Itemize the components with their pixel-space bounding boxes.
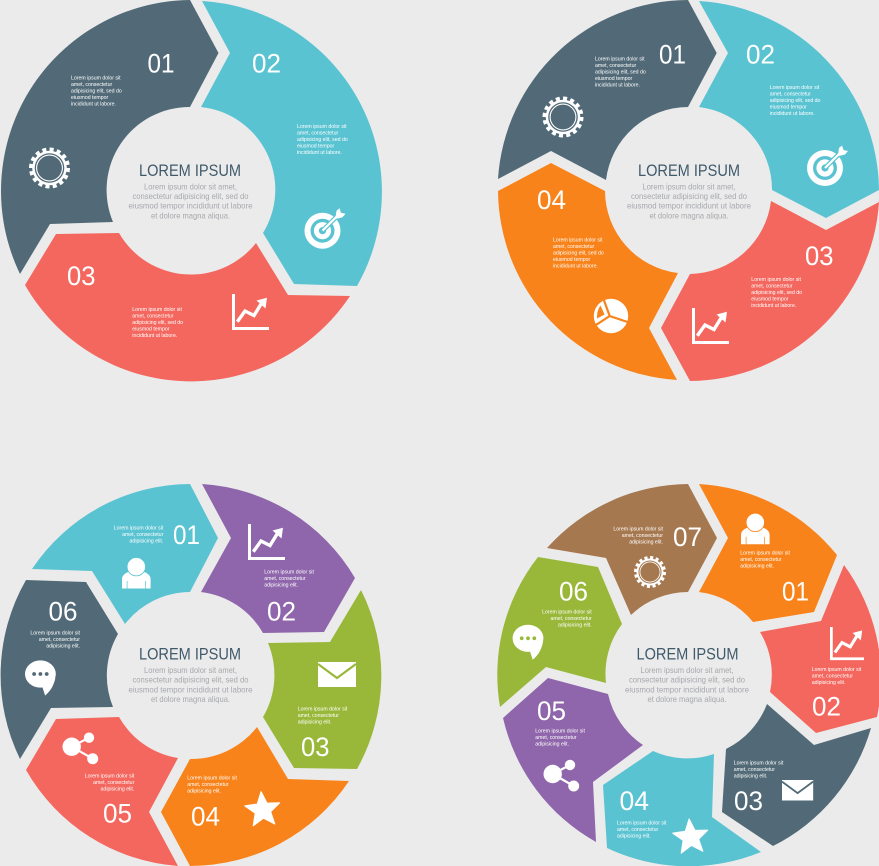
text block 02: amet, consectetur (770, 92, 811, 98)
text block 05: Lorem ipsum dolor sit (535, 729, 585, 735)
text block 02: Lorem ipsum dolor sit (770, 85, 820, 91)
number 01: 01 (173, 520, 200, 550)
center text: et dolore magna aliqua. (151, 695, 230, 704)
text block 05: Lorem ipsum dolor sit (85, 774, 135, 780)
text block 03: eiusmod tempor (751, 296, 789, 302)
text block 07: adipisicing elit. (629, 539, 663, 545)
text block 03: amet, consectetur (298, 713, 339, 719)
text block 02: adipisicing elit. (264, 583, 298, 589)
segment 02 purple (201, 484, 355, 633)
text block 02: adipisicing elit, sed do (770, 98, 821, 104)
number 03: 03 (734, 786, 763, 816)
center text: et dolore magna aliqua. (650, 211, 728, 220)
text block 01: Lorem ipsum dolor sit (71, 76, 121, 82)
number 06: 06 (559, 577, 588, 607)
text block 01: eiusmod tempor (595, 76, 632, 82)
text block 02: amet, consectetur (812, 674, 853, 680)
number 01: 01 (148, 49, 174, 79)
text block 01: amet, consectetur (595, 63, 637, 69)
center text: Lorem ipsum dolor sit amet, (640, 666, 734, 675)
text block 03: Lorem ipsum dolor sit (751, 277, 801, 283)
text block 02: eiusmod tempor (770, 104, 807, 110)
panel: three-step cycle diagram (1, 0, 382, 381)
text block 01: amet, consectetur (122, 532, 164, 538)
text block 03: eiusmod tempor (132, 326, 170, 332)
text block 03: incididunt ut labore. (751, 303, 796, 309)
center heading: LOREM IPSUM (636, 644, 738, 663)
text block 04: incididunt ut labore. (553, 264, 598, 270)
icon: target (807, 146, 848, 186)
icon: speech bubble (513, 625, 543, 660)
center text: consectetur adipisicing elit, sed do (132, 192, 249, 201)
number 02: 02 (267, 597, 296, 627)
text block 01: incididunt ut labore. (71, 102, 116, 108)
center text: consectetur adipisicing elit, sed do (629, 676, 745, 685)
icon: star (244, 790, 282, 826)
segment 02 blue (699, 1, 879, 218)
segment 07 brown (547, 484, 717, 615)
text block 03: adipisicing elit, sed do (132, 320, 183, 326)
number 02: 02 (812, 692, 841, 722)
text block 02: amet, consectetur (264, 576, 306, 582)
icon: envelope (318, 662, 356, 687)
number 03: 03 (805, 241, 834, 271)
panel: seven-step cycle diagram (497, 484, 879, 866)
text block 02: eiusmod tempor (297, 144, 334, 150)
text block 06: Lorem ipsum dolor sit (542, 609, 592, 615)
text block 04: adipisicing elit. (617, 833, 651, 839)
number 03: 03 (67, 261, 96, 291)
number 04: 04 (537, 185, 566, 215)
text block 03: amet, consectetur (751, 284, 793, 290)
text block 07: amet, consectetur (622, 533, 663, 539)
segment 06 dark slate (1, 580, 118, 759)
center text: eiusmod tempor incididunt ut labore (128, 202, 253, 211)
text block 04: amet, consectetur (187, 782, 229, 788)
text block 01: adipisicing elit, sed do (71, 88, 122, 94)
text block 01: adipisicing elit, sed do (595, 70, 646, 76)
text block 01: amet, consectetur (740, 557, 782, 563)
text block 06: Lorem ipsum dolor sit (30, 631, 81, 637)
text block 03: amet, consectetur (132, 314, 174, 320)
text block 03: amet, consectetur (734, 767, 775, 773)
segment 02 blue (201, 1, 382, 286)
center text: eiusmod tempor incididunt ut labore (128, 685, 253, 694)
number 02: 02 (252, 49, 281, 79)
text block 04: amet, consectetur (553, 244, 595, 250)
text block 03: adipisicing elit. (298, 720, 331, 726)
icon: share network (544, 760, 579, 792)
segment 04 orange (498, 163, 678, 380)
text block 04: Lorem ipsum dolor sit (617, 820, 667, 826)
text block 02: incididunt ut labore. (770, 111, 815, 117)
segment 05 purple (503, 678, 643, 842)
icon: person (741, 513, 770, 544)
text block 06: amet, consectetur (550, 616, 592, 622)
text block 04: adipisicing elit. (187, 788, 221, 794)
text block 02: amet, consectetur (297, 130, 339, 136)
number 07: 07 (673, 522, 702, 552)
center text: consectetur adipisicing elit, sed do (631, 192, 747, 201)
text block 05: amet, consectetur (93, 780, 135, 786)
number 05: 05 (103, 799, 132, 829)
text block 05: adipisicing elit. (535, 742, 569, 748)
center text: eiusmod tempor incididunt ut labore (625, 685, 749, 694)
segment 01 dark slate (1, 0, 219, 274)
segment 02 red (760, 565, 879, 733)
segment 01 dark slate (498, 0, 717, 180)
text block 02: incididunt ut labore. (297, 150, 342, 156)
center heading: LOREM IPSUM (638, 161, 740, 180)
segment 05 red (26, 717, 178, 866)
text block 04: Lorem ipsum dolor sit (553, 238, 603, 244)
segment 01 orange (699, 484, 837, 622)
text block 01: incididunt ut labore. (595, 83, 640, 89)
segment 04 blue (603, 751, 761, 866)
text block 05: adipisicing elit. (101, 787, 134, 793)
text block 06: adipisicing elit. (558, 622, 592, 628)
center text: Lorem ipsum dolor sit amet, (642, 182, 736, 191)
icon: pie chart (594, 298, 628, 333)
icon: gear (31, 150, 68, 186)
text block 03: Lorem ipsum dolor sit (132, 307, 182, 313)
icon: gear (636, 558, 664, 586)
icon: speech bubble (25, 660, 56, 696)
number 04: 04 (191, 802, 220, 832)
segment 06 green (497, 557, 622, 707)
center text: Lorem ipsum dolor sit amet, (144, 666, 237, 675)
text block 03: incididunt ut labore. (132, 333, 177, 339)
number 05: 05 (537, 696, 566, 726)
segment 04 orange (161, 727, 349, 866)
icon: envelope (782, 780, 813, 800)
text block 01: Lorem ipsum dolor sit (740, 551, 790, 557)
icon: gear (544, 98, 582, 136)
text block 03: adipisicing elit, sed do (751, 290, 802, 296)
icon: growth chart (830, 627, 864, 660)
text block 01: Lorem ipsum dolor sit (114, 525, 164, 531)
text block 02: Lorem ipsum dolor sit (264, 570, 314, 576)
text block 06: adipisicing elit. (46, 644, 80, 650)
segment 03 dark slate (722, 704, 871, 846)
center text: et dolore magna aliqua. (648, 695, 726, 704)
text block 03: Lorem ipsum dolor sit (298, 707, 348, 713)
number 01: 01 (782, 577, 809, 607)
number 03: 03 (301, 732, 330, 762)
number 01: 01 (659, 40, 686, 70)
text block 01: adipisicing elit. (740, 564, 774, 570)
icon: growth chart (692, 308, 729, 344)
icon: growth chart (232, 294, 269, 330)
text block 05: amet, consectetur (535, 735, 577, 741)
text block 02: Lorem ipsum dolor sit (812, 667, 862, 673)
center text: Lorem ipsum dolor sit amet, (144, 182, 237, 191)
text block 01: adipisicing elit. (130, 538, 163, 544)
number 04: 04 (620, 786, 649, 816)
segment 03 red (661, 201, 879, 381)
text block 02: adipisicing elit. (812, 680, 845, 686)
panel: six-step cycle diagram (1, 484, 381, 866)
text block 04: amet, consectetur (617, 827, 659, 833)
text block 01: amet, consectetur (71, 82, 113, 88)
center text: consectetur adipisicing elit, sed do (132, 676, 249, 685)
text block 03: Lorem ipsum dolor sit (734, 761, 784, 767)
center heading: LOREM IPSUM (139, 161, 241, 180)
segment 01 blue (32, 484, 218, 624)
text block 01: eiusmod tempor (71, 95, 108, 101)
panel: four-step cycle diagram (498, 0, 879, 381)
text block 04: adipisicing elit, sed do (553, 251, 604, 257)
text block 02: adipisicing elit, sed do (297, 137, 348, 143)
icon: share network (62, 732, 98, 764)
text block 02: Lorem ipsum dolor sit (297, 124, 347, 130)
text block 07: Lorem ipsum dolor sit (613, 526, 664, 532)
center text: et dolore magna aliqua. (151, 211, 230, 220)
text block 03: adipisicing elit. (734, 774, 767, 780)
icon: growth chart (248, 524, 285, 560)
text block 01: Lorem ipsum dolor sit (595, 57, 645, 63)
icon: star (672, 817, 710, 854)
text block 04: Lorem ipsum dolor sit (187, 775, 237, 781)
icon: target (304, 208, 346, 249)
number 06: 06 (48, 597, 78, 627)
number 02: 02 (746, 40, 775, 70)
center text: eiusmod tempor incididunt ut labore (627, 202, 751, 211)
icon: person (122, 558, 151, 588)
text block 04: eiusmod tempor (553, 257, 590, 263)
segment 03 green (263, 590, 381, 769)
text block 06: amet, consectetur (39, 637, 80, 643)
center heading: LOREM IPSUM (139, 644, 241, 663)
segment 03 red (25, 233, 350, 381)
